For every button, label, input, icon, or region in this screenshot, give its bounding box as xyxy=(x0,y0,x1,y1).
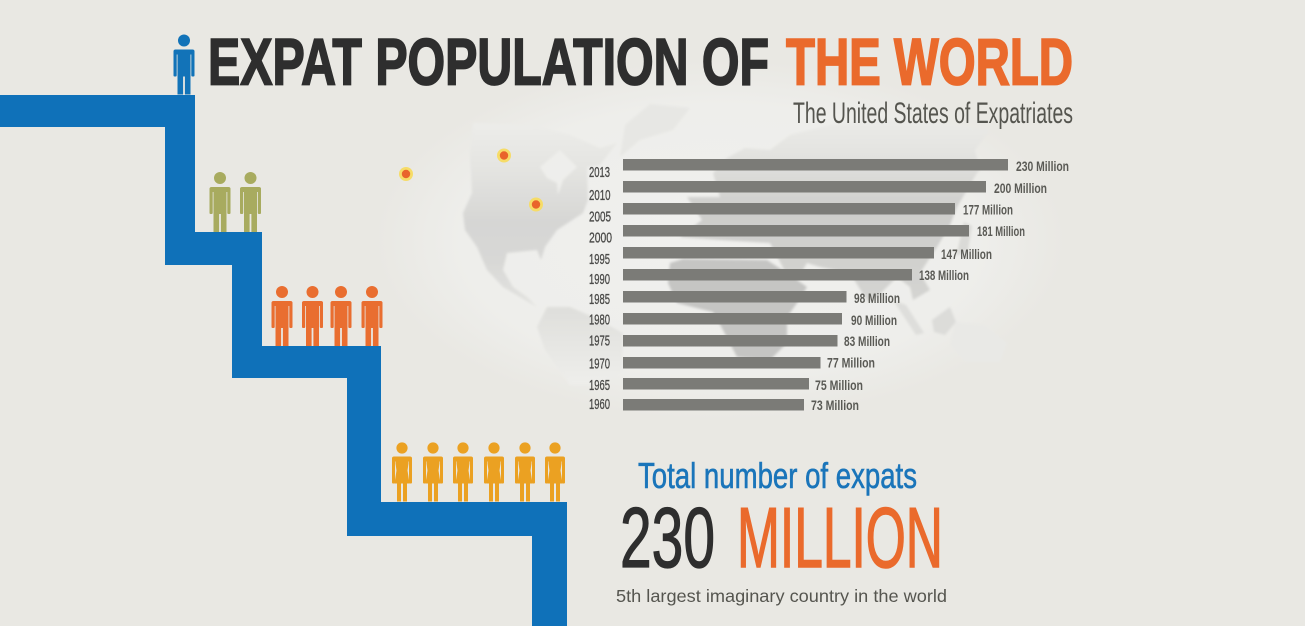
bar chart xyxy=(589,159,1069,413)
year labels: 2013 xyxy=(589,165,610,181)
value labels: 177 Million xyxy=(963,202,1013,218)
map: greenland xyxy=(620,104,690,157)
bars xyxy=(623,159,1008,410)
total heading: Total number of expats xyxy=(638,455,917,496)
value labels: 90 Million xyxy=(851,313,897,328)
value labels: 230 Million xyxy=(1016,159,1069,174)
year labels: 2010 xyxy=(589,188,610,204)
year labels: 1975 xyxy=(589,334,610,350)
staircase xyxy=(0,95,567,626)
value labels: 77 Million xyxy=(827,356,875,370)
map: japan xyxy=(956,222,972,256)
big number xyxy=(620,491,943,586)
year labels: 1960 xyxy=(589,397,610,413)
value labels: 83 Million xyxy=(844,334,890,349)
value labels: 75 Million xyxy=(815,378,863,393)
map: borneo xyxy=(932,307,956,335)
icons: yellow women xyxy=(392,442,565,502)
big number: MILLION xyxy=(737,491,943,586)
map: africa xyxy=(668,259,807,360)
value labels: 138 Million xyxy=(919,268,969,283)
big number: 230 xyxy=(620,491,715,586)
year labels: 1970 xyxy=(589,356,610,372)
year labels xyxy=(589,165,612,413)
subtitle: The United States of Expatriates xyxy=(793,97,1073,130)
map: sumatra xyxy=(893,300,924,335)
world map backdrop xyxy=(375,60,1065,420)
icons: orange people xyxy=(272,286,382,346)
value labels: 147 Million xyxy=(941,247,992,262)
map: eurasia xyxy=(680,120,990,302)
caption: 5th largest imaginary country in the world xyxy=(616,586,947,606)
year labels: 2000 xyxy=(589,230,612,246)
year labels: 1990 xyxy=(589,272,610,288)
icons: olive people xyxy=(210,172,261,232)
value labels: 200 Million xyxy=(994,181,1047,196)
year labels: 1985 xyxy=(589,292,610,308)
map marker xyxy=(497,148,511,162)
value labels: 98 Million xyxy=(854,291,900,306)
map: south america xyxy=(537,307,623,385)
icon: blue person xyxy=(174,34,194,94)
year labels: 1965 xyxy=(589,378,610,394)
value labels: 181 Million xyxy=(977,224,1025,239)
title: EXPAT POPULATION OF xyxy=(208,24,769,98)
title: THE WORLD xyxy=(786,24,1073,98)
year labels: 2005 xyxy=(589,210,611,226)
year labels: 1995 xyxy=(589,252,610,268)
map: australia xyxy=(950,322,1007,362)
year labels: 1980 xyxy=(589,312,610,328)
value labels xyxy=(811,159,1069,413)
map marker xyxy=(529,198,543,212)
value labels: 73 Million xyxy=(811,398,859,413)
map marker xyxy=(399,167,413,181)
map: north america xyxy=(463,123,617,307)
